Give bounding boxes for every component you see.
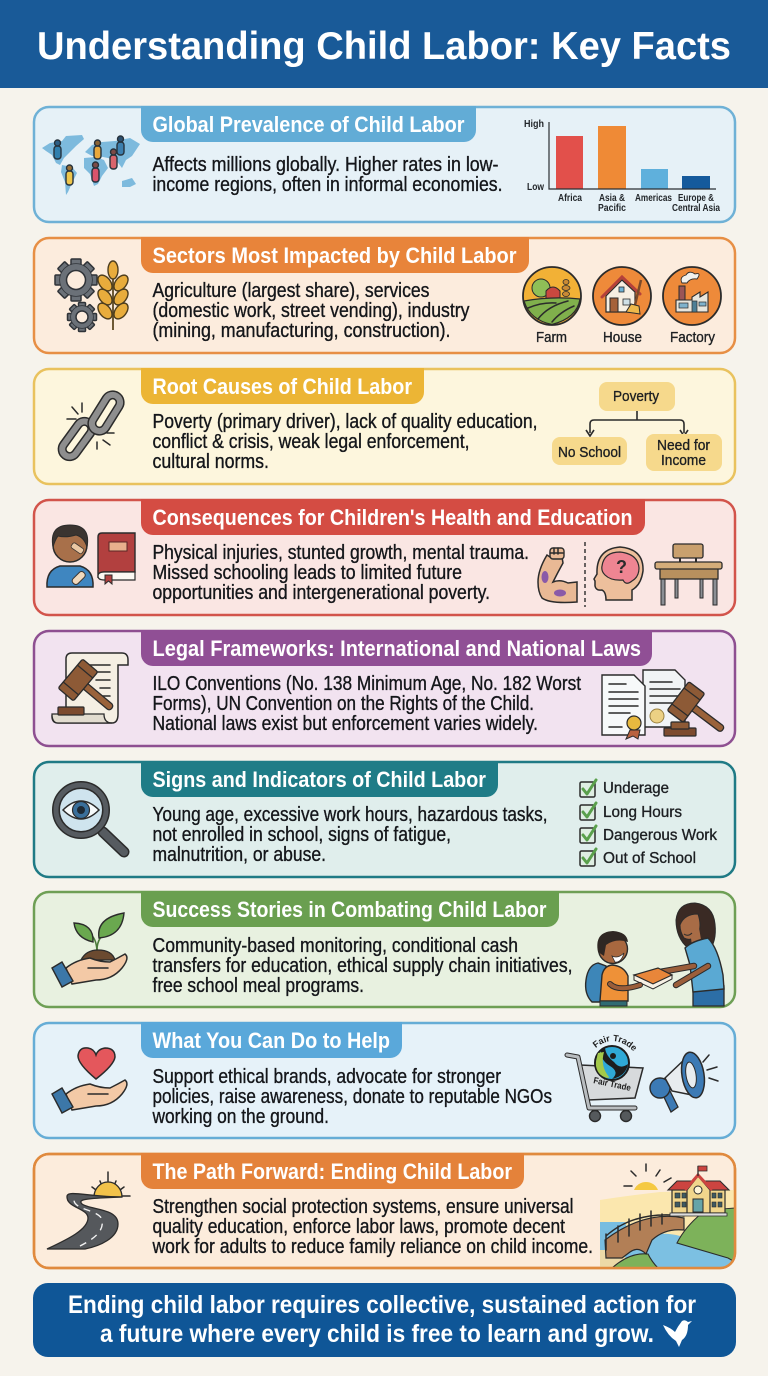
panel: consequences — [34, 499, 735, 615]
heading: path forward: The Path Forward: Ending Child Labor — [152, 1159, 512, 1184]
text: legal frameworks: National laws exist but enforcement varies widely. — [152, 713, 538, 735]
panel: signs and indicators — [34, 761, 735, 877]
icon: world map with people — [42, 135, 140, 195]
heading: root causes: Root Causes of Child Labor — [152, 374, 412, 399]
illustration: bridge to school — [600, 1164, 735, 1268]
panel: root causes — [34, 368, 735, 484]
bar chart: prevalence by region: Europe & — [678, 193, 714, 204]
icon: red book — [98, 533, 135, 584]
closing banner — [33, 1283, 736, 1357]
text: root causes: Poverty (primary driver), lack of quality education, — [152, 411, 538, 433]
heading: path forward — [141, 1153, 524, 1189]
heading: legal frameworks — [141, 630, 652, 666]
flow chart: poverty causes — [552, 382, 722, 471]
icon: bruised arm — [538, 548, 577, 602]
heading: signs — [141, 761, 498, 797]
heading: success stories: Success Stories in Combating Child Labor — [152, 897, 547, 922]
text: signs: not enrolled in school, signs of fatigue, — [152, 824, 451, 846]
label: house: House — [603, 329, 642, 346]
text: consequences — [152, 542, 529, 604]
icon: shopping cart with fair trade logo — [564, 1034, 644, 1122]
bar chart: prevalence by region: Low — [527, 182, 544, 193]
closing banner: Ending child labor requires collective, sustained action for — [68, 1291, 696, 1319]
heading: sectors: Sectors Most Impacted by Child Labor — [152, 243, 517, 268]
text: legal frameworks — [152, 673, 581, 735]
text: legal frameworks: Forms), UN Convention on the Rights of the Child. — [152, 693, 534, 715]
icon: white dove — [663, 1320, 692, 1347]
panel: path forward — [34, 1153, 735, 1268]
heading: what you can do: What You Can Do to Help — [152, 1028, 390, 1053]
text: signs: malnutrition, or abuse. — [152, 844, 326, 866]
icon: broken chain — [59, 392, 123, 460]
checklist: indicators: Out of School — [603, 850, 696, 867]
heading: global prevalence — [141, 106, 476, 142]
illustration: woman giving book to child — [586, 903, 724, 1006]
text: success stories — [152, 935, 572, 997]
text: success stories: transfers for education, ethical supply chain initiatives, — [152, 955, 572, 977]
panel: sectors — [34, 237, 735, 353]
closing banner: a future where every child is free to learn and grow. — [100, 1320, 654, 1348]
flow chart: poverty causes: Poverty — [613, 388, 659, 405]
icon: megaphone — [650, 1051, 718, 1112]
text: what you can do: working on the ground. — [152, 1106, 329, 1128]
text: legal frameworks: ILO Conventions (No. 138 Minimum Age, No. 182 Worst — [152, 673, 581, 695]
checklist: indicators: Dangerous Work — [603, 827, 718, 844]
text: root causes: cultural norms. — [152, 451, 269, 473]
text: signs: Young age, excessive work hours, hazardous tasks, — [152, 804, 548, 826]
text: what you can do — [152, 1066, 552, 1128]
text: sectors: Agriculture (largest share), services — [152, 280, 430, 302]
text: path forward: Strengthen social protection systems, ensure universal — [152, 1196, 574, 1218]
heading: legal frameworks: Legal Frameworks: International and National Laws — [152, 636, 641, 661]
flow chart: poverty causes: Income — [661, 452, 706, 469]
icon: hand holding heart — [52, 1048, 127, 1113]
text: root causes: conflict & crisis, weak legal enforcement, — [152, 431, 470, 453]
icon: house — [593, 267, 651, 325]
checklist: indicators: Long Hours — [603, 804, 682, 821]
text: success stories: Community-based monitoring, conditional cash — [152, 935, 518, 957]
text: global prevalence: Affects millions globally. Higher rates in low- — [152, 154, 498, 176]
text: what you can do: Support ethical brands, advocate for stronger — [152, 1066, 501, 1088]
icon: hand holding seedling — [52, 913, 127, 987]
icon: winding road to sunrise — [47, 1172, 130, 1249]
text: what you can do: policies, raise awareness, donate to reputable NGOs — [152, 1086, 552, 1108]
text: path forward: quality education, enforce labor laws, promote decent — [152, 1216, 565, 1238]
bar chart: prevalence by region: High — [524, 119, 544, 130]
icon: scroll and gavel — [52, 653, 128, 723]
icon: injured child — [47, 525, 93, 587]
bar chart: prevalence by region: Central Asia — [672, 203, 720, 214]
text: success stories: free school meal programs. — [152, 975, 364, 997]
text: path forward: work for adults to reduce family reliance on child income. — [152, 1236, 593, 1258]
heading: consequences — [141, 499, 645, 535]
title banner: Understanding Child Labor: Key Facts — [37, 25, 731, 68]
heading: what you can do — [141, 1022, 402, 1058]
bar chart: prevalence by region: Pacific — [598, 203, 626, 214]
text: consequences: opportunities and intergenerational poverty. — [152, 582, 490, 604]
bar chart: prevalence by region: Africa — [558, 193, 582, 204]
text: root causes — [152, 411, 538, 473]
divider: dashed line — [584, 542, 586, 607]
panel: legal frameworks — [34, 630, 735, 746]
icon: farm — [523, 267, 581, 325]
flow chart: poverty causes: Need for — [657, 437, 710, 454]
heading: signs: Signs and Indicators of Child Labor — [152, 767, 486, 792]
checklist: indicators — [580, 780, 718, 867]
icon: head with brain — [594, 547, 643, 600]
heading: success stories — [141, 891, 559, 927]
flow chart: poverty causes: No School — [558, 444, 621, 461]
icon: magnifying glass with eye — [56, 785, 124, 852]
text: sectors — [152, 280, 470, 342]
heading: sectors — [141, 237, 529, 273]
icon: head with brain: ? — [616, 557, 627, 577]
text: consequences: Missed schooling leads to limited future — [152, 562, 462, 584]
bar chart: prevalence by region — [524, 119, 720, 214]
panel: global prevalence — [34, 106, 735, 222]
text: global prevalence — [152, 154, 502, 196]
text: consequences: Physical injuries, stunted growth, mental trauma. — [152, 542, 529, 564]
text: global prevalence: income regions, often in informal economies. — [152, 174, 502, 196]
text: path forward — [152, 1196, 593, 1258]
label: farm: Farm — [536, 329, 567, 346]
checklist: indicators: Underage — [603, 780, 669, 797]
label: factory: Factory — [670, 329, 715, 346]
text: signs — [152, 804, 548, 866]
icon: gears and wheat — [55, 259, 131, 332]
icon: factory — [663, 267, 721, 325]
icon: school desk — [655, 544, 722, 605]
bar chart: prevalence by region: Americas — [635, 193, 672, 204]
bar chart: prevalence by region: Asia & — [599, 193, 625, 204]
text: sectors: (domestic work, street vending), industry — [152, 300, 470, 322]
text: sectors: (mining, manufacturing, construction). — [152, 320, 450, 342]
icon: legal documents with gavel — [602, 670, 734, 744]
title banner — [0, 0, 768, 88]
panel: success stories — [34, 891, 735, 1007]
heading: global prevalence: Global Prevalence of Child Labor — [152, 112, 465, 137]
panel: what you can do — [32, 1022, 736, 1140]
icon: shopping cart with fair trade logo: Fair Trade — [593, 1075, 632, 1093]
heading: root causes — [141, 368, 424, 404]
heading: consequences: Consequences for Children's Health and Education — [152, 505, 632, 530]
icon: shopping cart with fair trade logo: Fair Trade — [592, 1034, 636, 1050]
